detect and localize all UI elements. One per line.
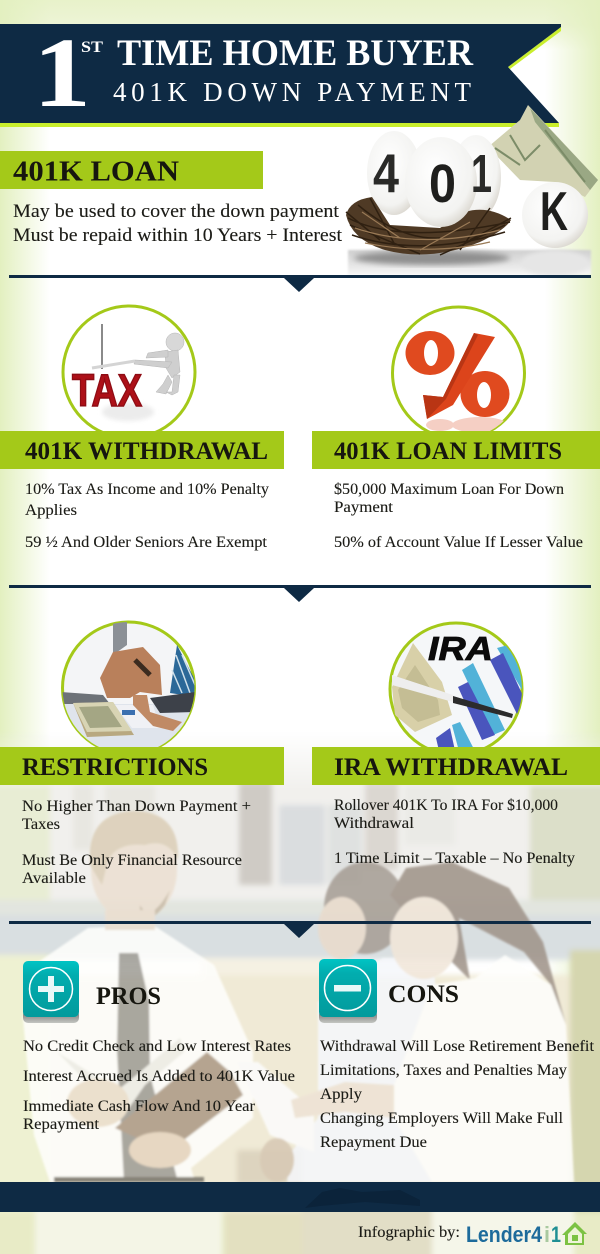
papers	[252, 1062, 315, 1146]
back eggs	[367, 131, 421, 215]
lower hand	[133, 695, 182, 731]
section: 401K withdrawal	[0, 431, 284, 551]
icon: minus button	[319, 959, 377, 1023]
logo: Lender4: Lender4	[466, 1222, 543, 1247]
background photo: couple with agent	[0, 730, 600, 1254]
heading bar	[0, 151, 263, 189]
wife face	[390, 897, 458, 979]
hand	[100, 647, 162, 698]
section: IRA withdrawal: 1 Time Limit – Taxable – No Penalty	[334, 850, 575, 867]
husband head	[324, 862, 406, 954]
wife hair	[390, 862, 566, 1025]
image: 401K eggs in nest with money: K	[540, 180, 568, 242]
section: pros: Interest Accrued Is Added to 401K Value	[23, 1068, 295, 1085]
section: 401K loan limits: Payment	[334, 499, 394, 516]
cash stack	[73, 702, 134, 737]
section: cons: Apply	[320, 1086, 362, 1103]
header banner	[0, 17, 561, 128]
footer credit: i	[544, 1222, 550, 1247]
section: IRA withdrawal	[312, 747, 600, 867]
body text: Rollover 401K To IRA For $10,000	[334, 797, 558, 814]
footer credit	[358, 1222, 587, 1247]
heading: IRA WITHDRAWAL	[334, 754, 568, 781]
rope	[92, 361, 135, 368]
people	[23, 811, 574, 1182]
trousers below band	[33, 1212, 224, 1254]
section: restrictions: Available	[22, 870, 86, 887]
agent tie	[117, 953, 178, 1182]
body line 1: May be used to cover the down payment	[13, 202, 340, 222]
section: pros: Repayment	[23, 1116, 100, 1133]
section: cons: Changing Employers Will Make Full	[320, 1110, 563, 1127]
photo backdrop: house, roof and lawn	[0, 730, 600, 1254]
agent head	[90, 843, 178, 910]
section: 401K loan limits: 50% of Account Value If Lesser Value	[334, 534, 583, 551]
icon: tax circle	[63, 306, 195, 438]
heading: 401K WITHDRAWAL	[25, 438, 268, 465]
list: No Credit Check and Low Interest Rates	[23, 1038, 291, 1055]
3D figure	[134, 333, 184, 395]
IRA label: IRA	[428, 630, 493, 667]
title line 2: 401K DOWN PAYMENT	[113, 77, 472, 107]
icon: IRA chart with pen and cash	[390, 623, 528, 755]
heading: 401K LOAN	[13, 156, 179, 188]
body line 2: Must be repaid within 10 Years + Interest	[13, 226, 343, 246]
heading: RESTRICTIONS	[22, 754, 208, 781]
icon: house	[562, 1222, 587, 1245]
section: 401K loan limits	[312, 431, 600, 551]
footer credit: 1	[551, 1222, 561, 1247]
heading bar	[312, 747, 600, 785]
section: restrictions: Taxes	[22, 816, 60, 833]
image: 401K eggs in nest with money: 1	[471, 144, 492, 204]
section: restrictions: Must Be Only Financial Resource	[22, 852, 242, 869]
heading bar	[0, 747, 284, 785]
pen	[392, 675, 453, 702]
credit text: Infographic by:	[358, 1224, 460, 1241]
TAX letters: TAX	[72, 365, 142, 416]
belt	[54, 1177, 204, 1182]
heading bar	[0, 431, 284, 469]
divider arrow 1	[9, 275, 591, 292]
K egg	[522, 182, 588, 248]
navy ribbon	[0, 24, 561, 123]
card	[115, 705, 160, 728]
tie	[170, 645, 196, 697]
wife blouse	[430, 955, 575, 1182]
wife arm	[291, 1082, 394, 1118]
agent shirt	[23, 925, 253, 1182]
icon: percent circle	[392, 307, 524, 439]
heading: PROS	[96, 983, 161, 1010]
pole	[101, 324, 103, 369]
book	[115, 1052, 243, 1152]
egg digits: 4	[373, 142, 399, 204]
heading: CONS	[388, 981, 459, 1008]
husband hand	[260, 1138, 294, 1182]
heading bar	[312, 431, 600, 469]
calculator	[150, 692, 195, 713]
section: restrictions	[0, 747, 284, 887]
money	[488, 105, 598, 197]
cash	[392, 643, 452, 732]
section: 401K withdrawal: 59 ½ And Older Seniors Are Exempt	[25, 534, 268, 551]
numeral 1: 1	[33, 17, 91, 128]
section: cons: Limitations, Taxes and Penalties May	[320, 1062, 567, 1079]
front egg	[405, 137, 477, 227]
image: 401K eggs in nest with money	[346, 105, 598, 276]
divider arrow 2	[9, 585, 591, 602]
title line 1: TIME HOME BUYER	[117, 33, 474, 74]
icon: plus button	[23, 961, 79, 1023]
divider arrow 3	[9, 921, 591, 938]
icon: hands with calculator and cash	[60, 622, 200, 754]
section: pros	[23, 961, 295, 1133]
section: pros: Immediate Cash Flow And 10 Year	[23, 1098, 256, 1115]
section: IRA withdrawal: Withdrawal	[334, 815, 414, 832]
superscript ST: ST	[81, 39, 103, 56]
section: cons	[319, 959, 595, 1151]
agent hands	[67, 1079, 129, 1127]
reflection	[348, 250, 591, 275]
body text: 10% Tax As Income and 10% Penalty	[25, 481, 269, 498]
body text: $50,000 Maximum Loan For Down	[334, 481, 564, 498]
section: 401K withdrawal: Applies	[25, 502, 77, 519]
section: 401K loan	[0, 151, 343, 246]
image: 401K eggs in nest with money: 0	[429, 154, 456, 214]
body text: No Higher Than Down Payment +	[22, 798, 251, 815]
husband shirt	[287, 958, 440, 1182]
footer band	[0, 1182, 600, 1212]
heading: 401K LOAN LIMITS	[334, 438, 562, 465]
list: Withdrawal Will Lose Retirement Benefit	[320, 1038, 595, 1055]
nest	[346, 197, 511, 254]
section: cons: Repayment Due	[320, 1134, 427, 1151]
lime banner edge	[0, 123, 559, 127]
